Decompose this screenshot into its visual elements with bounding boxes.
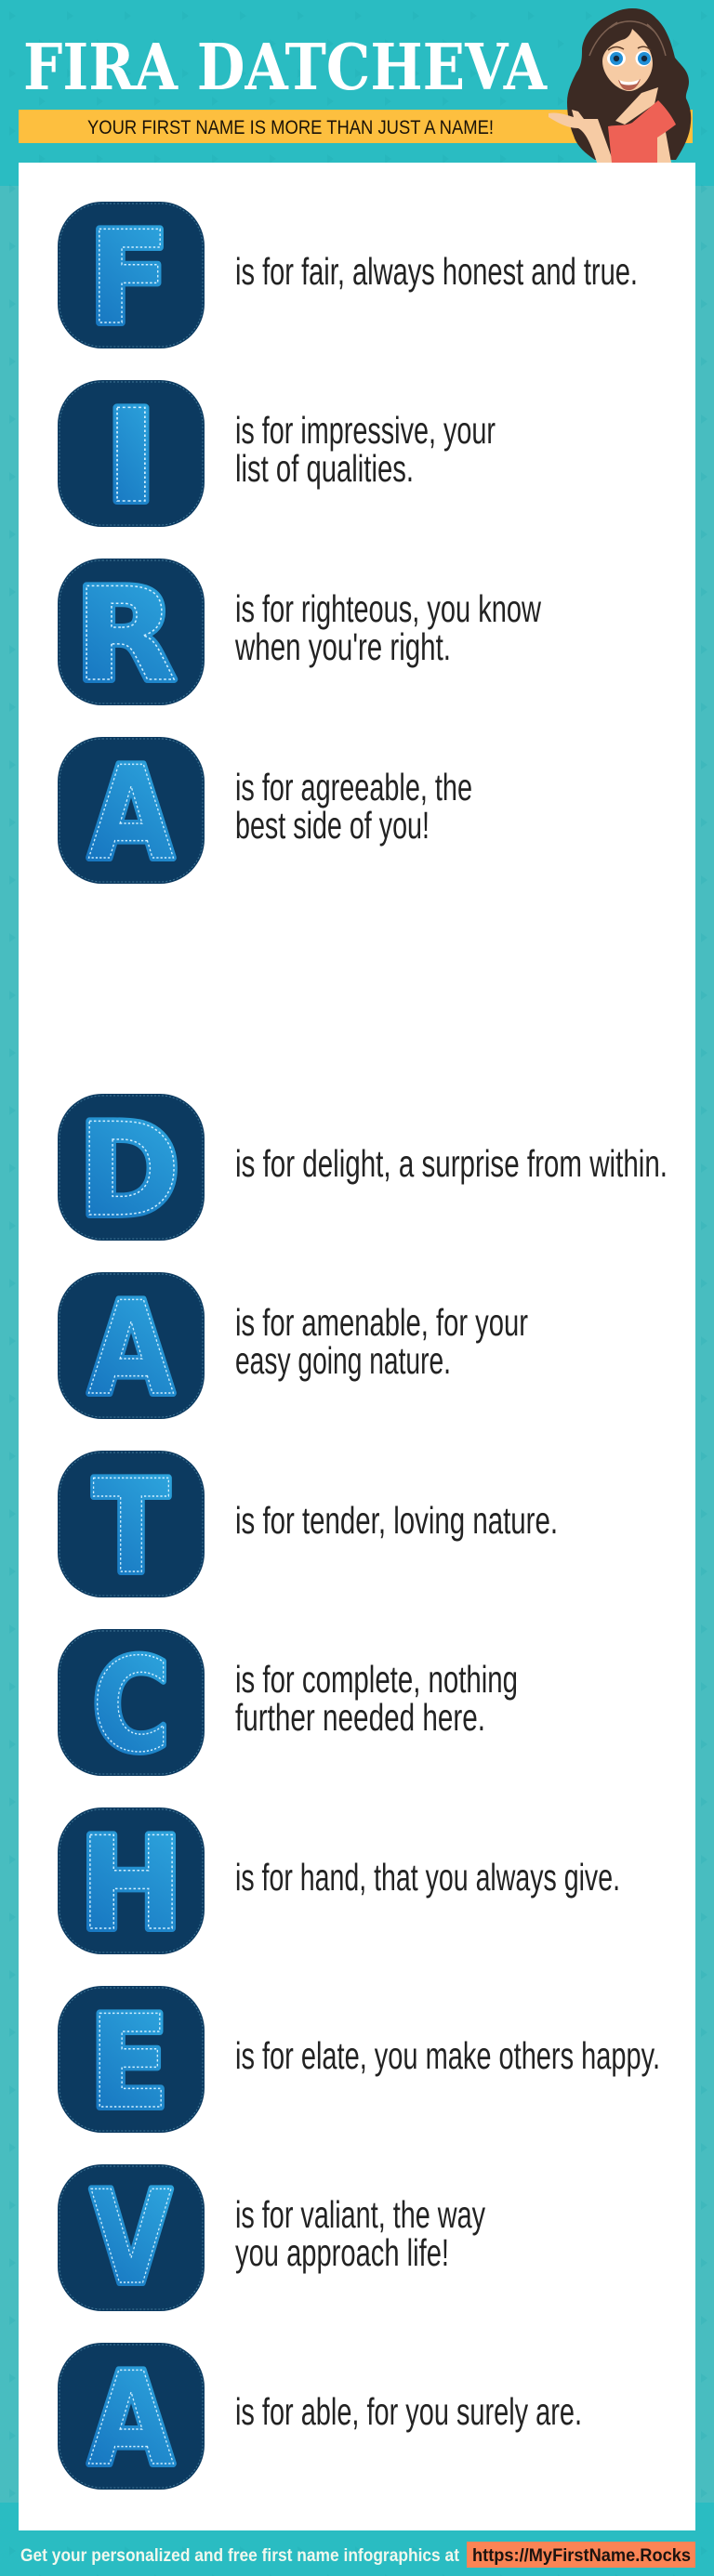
letter T: T: [93, 1452, 169, 1602]
text: easy going nature.: [235, 1339, 451, 1382]
letter R: R: [74, 560, 177, 710]
text: is for impressive, your: [235, 409, 496, 452]
badge: [58, 1094, 205, 1241]
text: [235, 2193, 485, 2274]
text: list of qualities.: [235, 447, 414, 490]
letter E: E: [89, 1988, 169, 2137]
text: is for tender, loving nature.: [235, 1499, 558, 1542]
text: further needed here.: [235, 1696, 485, 1739]
row: A: [58, 2343, 582, 2494]
illustration: smiling woman: [549, 8, 691, 163]
row: I: [58, 380, 496, 532]
row: V: [58, 2163, 485, 2313]
footer: [20, 2542, 695, 2568]
row: E: [58, 1986, 660, 2137]
letter C: C: [92, 1631, 170, 1781]
badge: [58, 1451, 205, 1597]
row: A: [58, 737, 472, 888]
letter C: C: [92, 1631, 170, 1781]
subtitle banner: YOUR FIRST NAME IS MORE THAN JUST A NAME!: [87, 117, 494, 138]
letter F: F: [88, 204, 170, 353]
row: A: [58, 1272, 528, 1424]
badge: [58, 1629, 205, 1776]
letter I: I: [104, 382, 158, 532]
text: [235, 1658, 518, 1739]
letter H: H: [78, 1809, 184, 1959]
row: D: [58, 1094, 668, 1245]
title: FIRA DATCHEVA: [23, 31, 548, 105]
badge: [58, 202, 205, 348]
letter D: D: [78, 1096, 180, 1245]
letter A: A: [88, 2345, 174, 2494]
letter E: E: [89, 1988, 169, 2137]
text: [234, 587, 541, 668]
badge: [58, 1272, 205, 1419]
text: [235, 409, 496, 490]
badge: [58, 559, 205, 705]
letter A: A: [88, 739, 174, 888]
badge: [58, 380, 205, 527]
badge: [58, 2343, 205, 2490]
letter V: V: [91, 2163, 172, 2313]
text: is for amenable, for your: [235, 1301, 528, 1344]
row: F: [58, 202, 638, 353]
letter H: H: [78, 1809, 184, 1959]
letter V: V: [91, 2163, 172, 2313]
text: [235, 1301, 528, 1382]
letter I: I: [104, 382, 158, 532]
badge: [58, 737, 205, 884]
letter D: D: [78, 1096, 180, 1245]
letter R: R: [74, 560, 177, 710]
letter A: A: [88, 1274, 174, 1424]
text: you approach life!: [235, 2231, 449, 2274]
badge: [58, 1986, 205, 2133]
letter A: A: [88, 1274, 174, 1424]
subtitle banner: [19, 110, 693, 143]
text: is for righteous, you know: [235, 587, 541, 630]
text: is for valiant, the way: [235, 2193, 485, 2236]
text: best side of you!: [235, 804, 430, 847]
footer link: https://MyFirstName.Rocks: [472, 2546, 691, 2566]
letter A: A: [88, 739, 174, 888]
text: is for complete, nothing: [235, 1658, 518, 1701]
badge: [58, 2164, 205, 2311]
footer text: Get your personalized and free first name infographics at: [20, 2546, 460, 2566]
text: [235, 766, 472, 847]
text: when you're right.: [234, 625, 451, 668]
row: C: [58, 1629, 518, 1781]
row: R: [58, 559, 541, 710]
letter T: T: [93, 1452, 169, 1602]
row: T: [58, 1451, 558, 1602]
letter F: F: [88, 204, 170, 353]
row: H: [58, 1807, 620, 1959]
text: is for able, for you surely are.: [235, 2390, 582, 2433]
letter A: A: [88, 2345, 174, 2494]
text: is for agreeable, the: [235, 766, 472, 808]
badge: [58, 1807, 205, 1954]
